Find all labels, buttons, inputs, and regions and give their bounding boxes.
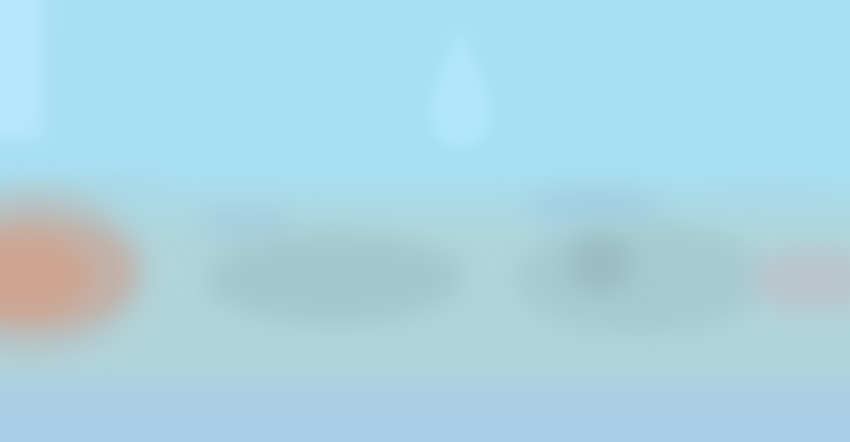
droplet highlight — [431, 28, 490, 147]
middle grey ellipse — [205, 232, 465, 324]
left orange blob ring — [0, 217, 133, 329]
left light strip — [0, 0, 43, 140]
far right pink blob — [749, 250, 850, 310]
left orange blob core — [0, 236, 90, 316]
left orange blob halo — [0, 188, 145, 356]
right grey ellipse — [515, 222, 765, 334]
horizon blue haze — [40, 180, 830, 237]
right dark circle — [568, 236, 632, 292]
